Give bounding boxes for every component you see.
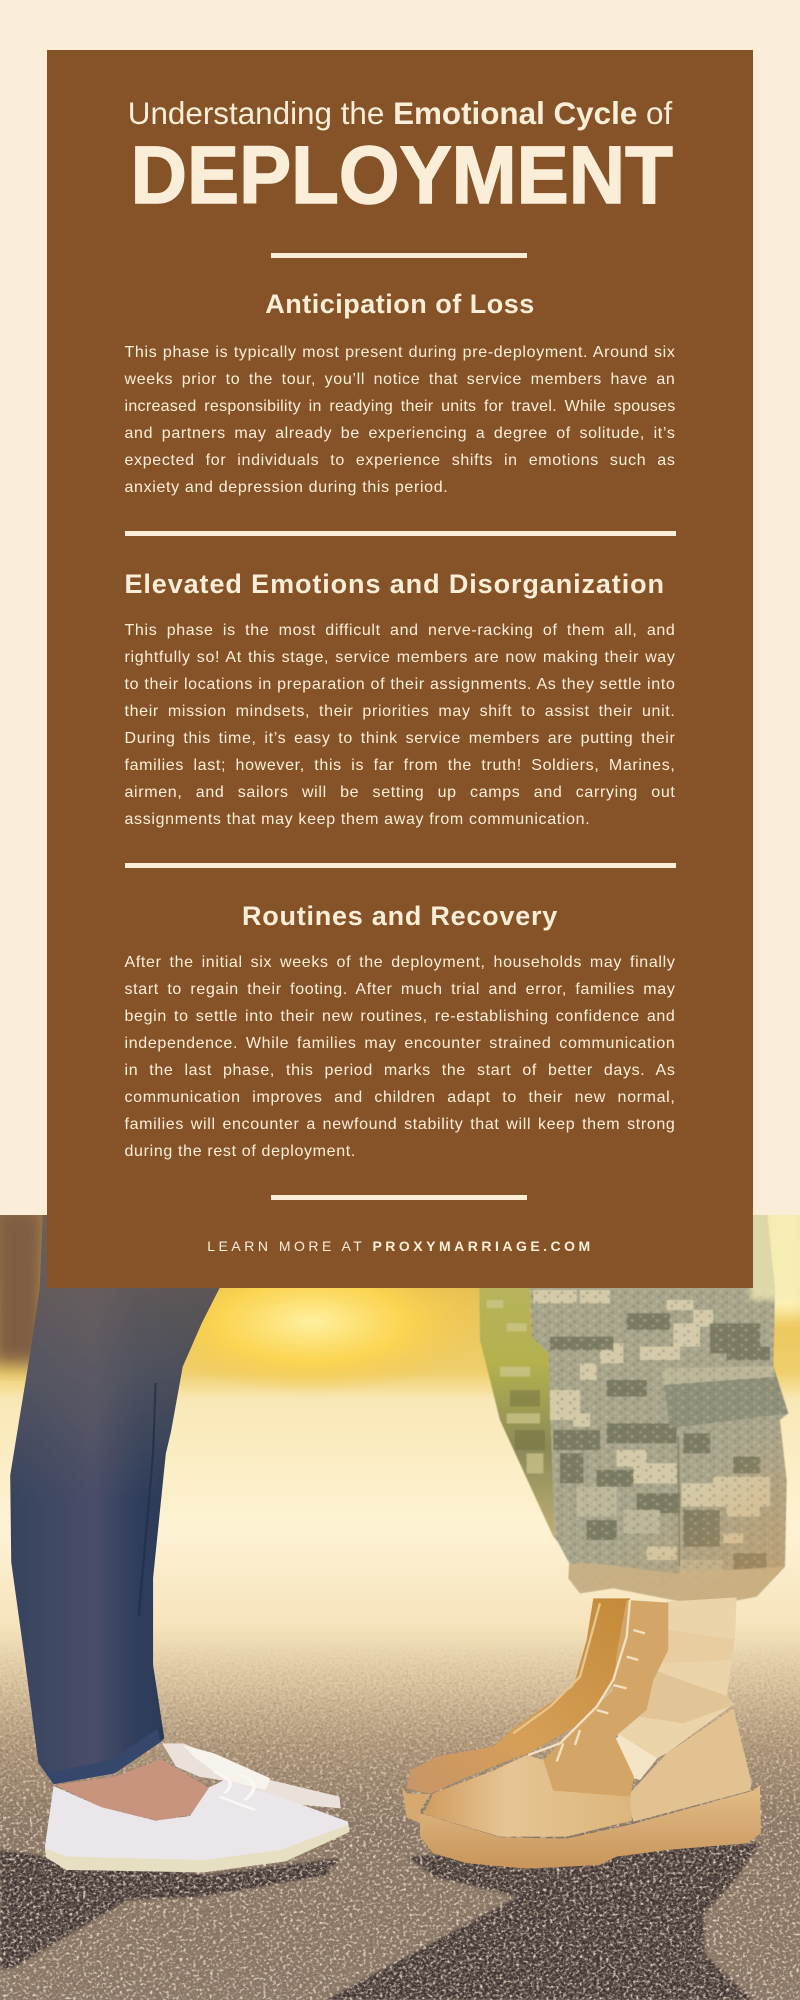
divider after section one bbox=[124, 531, 676, 536]
title: first line: Understanding the Emotional Cycle of bbox=[128, 96, 672, 131]
text block: start to regain their footing. After much trial and error, families may bbox=[124, 981, 676, 998]
text block bbox=[124, 954, 676, 1160]
text block: anxiety and depression during this period. bbox=[124, 479, 448, 496]
text block: increased responsibility in readying their units for travel. While spouses bbox=[124, 398, 676, 415]
text block: During this time, it’s easy to think service members are putting their bbox=[124, 730, 676, 747]
section: Elevated Emotions and Disorganization bbox=[124, 569, 676, 828]
rear boot bbox=[402, 1598, 630, 1823]
text block: and partners may already be experiencing a degree of solitude, it’s bbox=[124, 425, 676, 442]
rear trouser leg bbox=[479, 1288, 558, 1542]
camouflage trousers bbox=[478, 1207, 788, 1606]
text block: in the last phase, this period marks the start of better days. As bbox=[124, 1062, 676, 1079]
photo: couple's feet facing each other at sunset bbox=[0, 1215, 800, 2000]
text block: This phase is the most difficult and nerve-racking of them all, and bbox=[124, 622, 676, 639]
text block bbox=[124, 622, 676, 828]
heading: Anticipation of Loss bbox=[265, 289, 535, 319]
section: Anticipation of Loss bbox=[124, 289, 676, 496]
text block: independence. While families may encounter strained communication bbox=[124, 1035, 676, 1052]
text block: begin to settle into their new routines, re-establishing confidence and bbox=[124, 1008, 676, 1025]
rear sneaker bbox=[162, 1743, 341, 1808]
combat boots bbox=[402, 1597, 761, 1869]
text block: during the rest of deployment. bbox=[124, 1143, 356, 1160]
text block: weeks prior to the tour, you’ll notice that service members have an bbox=[124, 371, 676, 388]
divider under title bbox=[271, 253, 527, 258]
heading: Elevated Emotions and Disorganization bbox=[124, 569, 665, 599]
text block: After the initial six weeks of the deployment, households may finally bbox=[124, 954, 676, 971]
cargo pocket flap bbox=[662, 1366, 788, 1428]
divider above footer bbox=[271, 1195, 527, 1200]
warm light on trouser hem bbox=[646, 1456, 786, 1584]
camouflage blotches bbox=[533, 1290, 770, 1560]
jeans bbox=[10, 1215, 219, 1784]
white sneakers bbox=[45, 1743, 349, 1872]
text block: families will encounter a newfound stability that will keep them strong bbox=[124, 1116, 676, 1133]
text block: airmen, and sailors will be setting up camps and carrying out bbox=[124, 784, 676, 801]
text block: rightfully so! At this stage, service members are now making their way bbox=[124, 649, 676, 666]
heading: Routines and Recovery bbox=[242, 900, 558, 930]
front boot bbox=[420, 1597, 761, 1869]
text block: their mission mindsets, their priorities may shift to assist their unit. bbox=[124, 703, 676, 720]
text block: families last; however, this is far from the truth! Soldiers, Marines, bbox=[124, 757, 676, 774]
title: DEPLOYMENT: DEPLOYMENT bbox=[131, 130, 673, 221]
sunlight on trouser top beside panel bbox=[747, 1215, 776, 1303]
text block: communication improves and children adapt to their new normal, bbox=[124, 1089, 676, 1106]
text block: to their locations in preparation of their assignments. As they settle into bbox=[124, 676, 676, 693]
panel: main brown text panel bbox=[47, 50, 753, 1288]
text block: This phase is typically most present during pre-deployment. Around six bbox=[124, 344, 676, 361]
footer call to action: LEARN MORE AT PROXYMARRIAGE.COM bbox=[207, 1238, 594, 1254]
asphalt shadows bbox=[0, 1843, 760, 2000]
text block bbox=[124, 344, 676, 496]
foot bbox=[55, 1759, 210, 1821]
front trouser leg bbox=[528, 1207, 788, 1606]
front sneaker bbox=[45, 1772, 349, 1872]
divider after section two bbox=[124, 863, 676, 868]
text block: assignments that may keep them away from communication. bbox=[124, 811, 590, 828]
text block: expected for individuals to experience shifts in emotions such as bbox=[124, 452, 676, 469]
background: road and sunset glow bbox=[0, 1195, 800, 2000]
section: Routines and Recovery bbox=[124, 900, 676, 1160]
